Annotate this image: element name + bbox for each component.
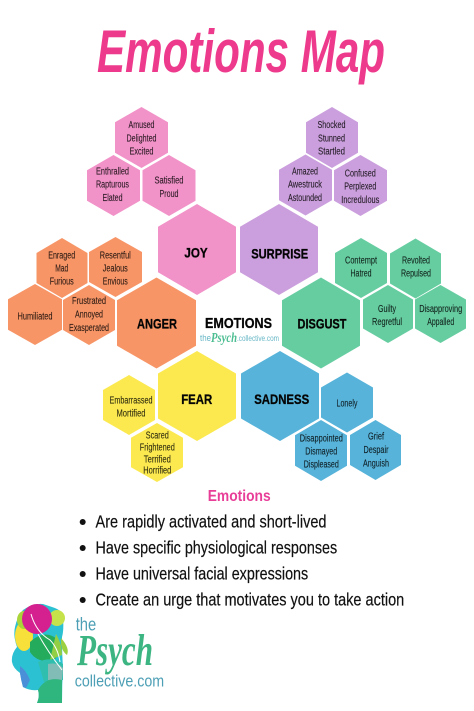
hexagon: surprise: [240, 204, 318, 295]
hexagon: surprise: SURPRISE: [251, 246, 308, 262]
hexagon: enthralled: Elated: [102, 193, 122, 204]
hexagon: disgust: [282, 278, 360, 368]
center label: emotions: EMOTIONS: [205, 316, 272, 332]
hexagon: guilty: [363, 285, 413, 343]
hexagon: joy: JOY: [184, 244, 208, 260]
bullet 4: Create an urge that motivates you to take action: [96, 589, 404, 609]
hexagon: disapproving: [415, 285, 466, 343]
hexagon: scared: Scared: [146, 431, 169, 442]
hexagon: amused: Amused: [128, 120, 154, 131]
hexagon: grief: Despair: [364, 445, 389, 456]
hexagon: resentful: [89, 237, 142, 297]
hexagon: grief: Grief: [368, 432, 384, 443]
panel: joy cluster: [87, 107, 236, 295]
hexagon: satisfied: [142, 155, 196, 216]
hexagon: disapproving: Appalled: [427, 317, 454, 328]
hexagon: shocked: Stunned: [318, 133, 345, 144]
hexagon: contempt: Contempt: [345, 256, 377, 267]
hexagon: shocked: Shocked: [318, 120, 346, 131]
hexagon: satisfied: Proud: [160, 189, 178, 200]
hexagon: embarrassed: [103, 375, 155, 435]
logo: wordmark: Psych: [76, 626, 153, 675]
hexagon: amazed: Awestruck: [288, 180, 323, 191]
hexagon: enraged: Mad: [55, 263, 68, 274]
heading: emotions: Emotions: [208, 488, 271, 505]
hexagon: disappointed: [295, 420, 347, 481]
bullet 2: Have specific physiological responses: [96, 537, 337, 557]
hexagon: embarrassed: Embarrassed: [110, 395, 152, 406]
hexagon: amazed: [279, 154, 332, 216]
panel: disgust cluster: [282, 238, 466, 368]
hexagon: resentful: Jealous: [103, 263, 128, 274]
center label: emotions: Psych: [211, 331, 237, 346]
hexagon: enraged: Enraged: [48, 250, 75, 261]
logo: wordmark: the: [76, 615, 96, 635]
hexagon: enthralled: [87, 155, 140, 216]
hexagon: confused: [334, 155, 387, 216]
hexagon: confused: Perplexed: [344, 182, 376, 193]
hexagon: revolted: Revolted: [402, 256, 430, 267]
hexagon: enraged: [36, 238, 88, 298]
hexagon: disappointed: Displeased: [304, 459, 339, 470]
center label: emotions: .collective.com: [237, 333, 279, 343]
hexagon: grief: [350, 420, 401, 480]
bullet 1: Are rapidly activated and short-lived: [96, 512, 326, 532]
hexagon: resentful: Resentful: [100, 250, 131, 261]
hexagon: enthralled: Rapturous: [96, 180, 129, 191]
panel: fear cluster: [103, 351, 236, 482]
hexagon: sadness: SADNESS: [254, 391, 309, 407]
hexagon: lonely: [321, 372, 373, 432]
hexagon: sadness: [241, 351, 319, 441]
bullet list: [80, 512, 404, 609]
hexagon: disappointed: Dismayed: [305, 447, 337, 458]
panel: surprise cluster: [240, 107, 387, 295]
hexagon: disgust: DISGUST: [298, 316, 347, 332]
hexagon: revolted: Repulsed: [401, 269, 431, 280]
panel: sadness cluster: [241, 351, 401, 481]
hexagon: amused: Excited: [130, 147, 154, 158]
hexagon: anger: ANGER: [137, 316, 177, 332]
hexagon: guilty: Regretful: [372, 317, 402, 328]
hexagon: amazed: Amazed: [292, 166, 318, 177]
hexagon: contempt: Hatred: [350, 269, 372, 280]
hexagon: shocked: [306, 107, 358, 168]
panel: anger cluster: [8, 237, 196, 368]
center label: emotions: the: [200, 333, 211, 343]
hexagon: satisfied: Satisfied: [154, 175, 184, 186]
hexagon: frustrated: Frustrated: [72, 296, 106, 307]
hexagon: revolted: [390, 238, 441, 298]
hexagon: frustrated: [63, 285, 115, 345]
hexagon: frustrated: Exasperated: [69, 323, 109, 334]
hexagon: contempt: [335, 238, 387, 298]
hexagon: enraged: Furious: [50, 276, 74, 287]
hexagon: disappointed: Disappointed: [300, 433, 343, 444]
hexagon: humiliated: [8, 284, 62, 345]
hexagon: amused: Delighted: [126, 133, 156, 144]
hexagon: enthralled: Enthralled: [96, 166, 129, 177]
hexagon: amazed: Astounded: [288, 193, 322, 204]
center label: emotions: [200, 316, 279, 346]
hexagon: guilty: Guilty: [378, 304, 396, 315]
hexagon: lonely: Lonely: [336, 398, 358, 409]
hexagon: scared: Frightened: [140, 443, 175, 454]
hexagon: grief: Anguish: [363, 458, 389, 469]
logo: wordmark: [75, 615, 164, 691]
hexagon: joy: [158, 204, 236, 295]
hexagon: scared: [131, 423, 183, 482]
hexagon: anger: [117, 278, 196, 368]
hexagon: scared: Horrified: [143, 466, 171, 477]
hexagon: resentful: Envious: [103, 276, 128, 287]
hexagon: frustrated: Annoyed: [75, 309, 103, 320]
logo: wordmark: collective.com: [75, 673, 164, 691]
hexagon: confused: Incredulous: [341, 195, 379, 206]
hexagon: fear: FEAR: [181, 391, 212, 407]
logo: head icon: [12, 604, 68, 703]
hexagon: confused: Confused: [345, 168, 376, 179]
hexagon: humiliated: Humiliated: [18, 312, 52, 323]
hexagon: amused: [115, 107, 168, 168]
bullet 3: Have universal facial expressions: [96, 563, 308, 583]
hexagon: embarrassed: Mortified: [116, 409, 146, 420]
hexagon: shocked: Startled: [318, 147, 345, 158]
hexagon: scared: Terrified: [144, 454, 171, 465]
